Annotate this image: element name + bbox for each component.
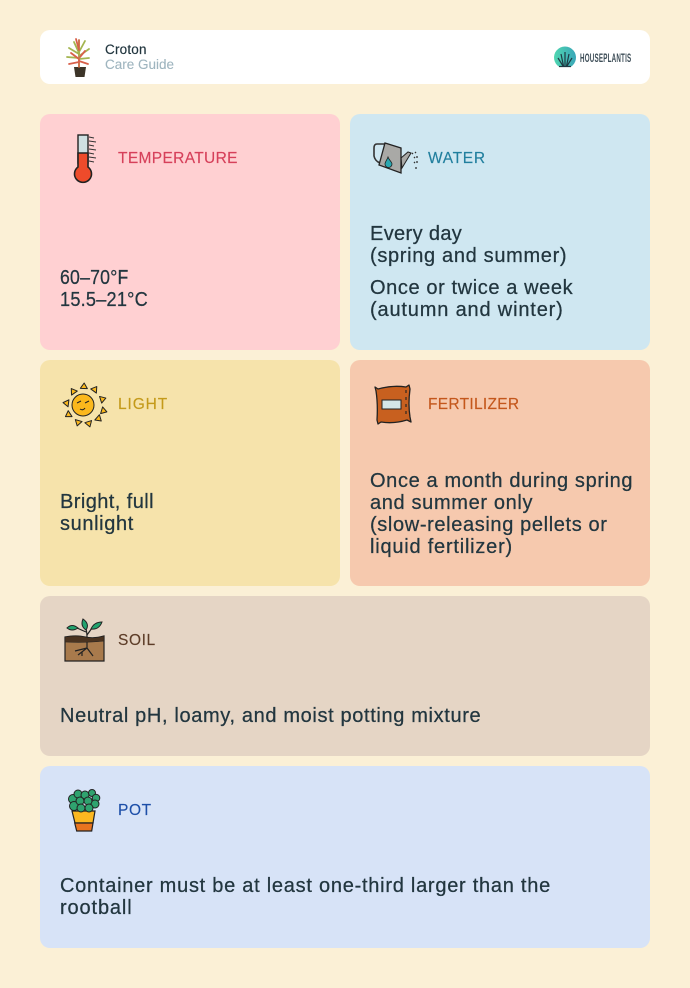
- text: fertilizer schedule: [370, 470, 633, 558]
- text: soil needs: Neutral pH, loamy, and moist potting mixture: [60, 705, 481, 727]
- text: pot size: Container must be at least one-third larger than the: [60, 875, 551, 897]
- heading: pot: POT: [118, 802, 152, 819]
- icon: thermometer: [74, 134, 96, 184]
- heading: water: WATER: [428, 150, 486, 167]
- text: light needs: sunlight: [60, 513, 134, 535]
- text: fertilizer schedule: Once a month during spring: [370, 470, 633, 492]
- text: temperature range: [60, 267, 148, 311]
- text: watering schedule: Every day: [370, 223, 462, 245]
- text: temperature range: 60–70°F: [60, 267, 129, 289]
- text: pot size: [60, 875, 551, 919]
- icon: sun: [62, 382, 108, 428]
- text: light needs: [60, 491, 154, 535]
- text: fertilizer schedule: liquid fertilizer): [370, 536, 513, 558]
- panel: pot: [40, 766, 650, 948]
- text: light needs: Bright, full: [60, 491, 154, 513]
- heading: temperature: TEMPERATURE: [118, 150, 238, 167]
- text: watering schedule: [370, 223, 567, 267]
- title: Croton Care Guide: [105, 42, 174, 72]
- icon: plant in soil: [64, 618, 105, 662]
- text: watering schedule: (spring and summer): [370, 245, 567, 267]
- header bar: [40, 30, 650, 84]
- panel: light: [40, 360, 340, 586]
- icon: croton plant: [66, 38, 90, 77]
- panel: soil: [40, 596, 650, 756]
- panel: fertilizer: [350, 360, 650, 586]
- text: fertilizer schedule: and summer only: [370, 492, 533, 514]
- text: watering schedule autumn: (autumn and winter): [370, 299, 564, 321]
- icon: potted plant: [68, 789, 100, 832]
- icon: fertilizer bag: [374, 384, 412, 425]
- text: temperature range: 15.5–21°C: [60, 289, 148, 311]
- icon: watering can: [373, 142, 418, 174]
- text: fertilizer schedule: (slow-releasing pellets or: [370, 514, 608, 536]
- heading: soil: SOIL: [118, 632, 156, 649]
- heading: light: LIGHT: [118, 396, 168, 413]
- panel: water: [350, 114, 650, 350]
- text: pot size: rootball: [60, 897, 133, 919]
- logo: Houseplantis: HOUSEPLANTIS: [580, 51, 631, 65]
- title: Croton Care Guide: Care Guide: [105, 57, 174, 72]
- heading: fertilizer: FERTILIZER: [428, 396, 519, 413]
- text: watering schedule autumn: [370, 277, 573, 321]
- panel: temperature: [40, 114, 340, 350]
- logo: Houseplantis: [554, 46, 631, 68]
- text: watering schedule autumn: Once or twice a week: [370, 277, 573, 299]
- title: Croton Care Guide: Croton: [105, 42, 147, 57]
